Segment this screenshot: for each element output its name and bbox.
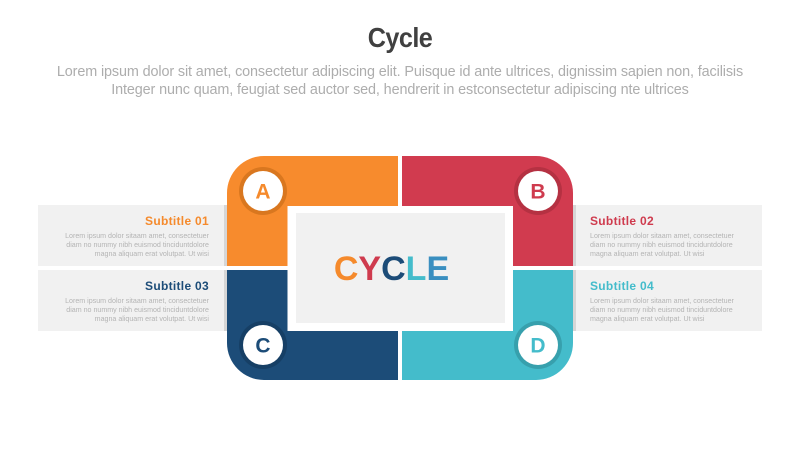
- panel: subtitle 04: diam no nummy nibh euismod tinciduntdolore: [590, 306, 733, 314]
- panel: subtitle 03: Subtitle 03: [145, 279, 209, 293]
- intro text: Integer nunc quam, feugiat sed auctor sed, hendrerit in estconsectetur adipiscing nte ultrices: [111, 82, 689, 98]
- badge A: A: [255, 180, 271, 204]
- panel: subtitle 01: Lorem ipsum dolor sitaam amet, consectetuer: [65, 232, 209, 240]
- title: Cycle: [368, 22, 432, 53]
- panel: subtitle 01: diam no nummy nibh euismod tinciduntdolore: [66, 241, 209, 249]
- badge D: D: [530, 334, 546, 358]
- panel: subtitle 03: [38, 270, 227, 331]
- panel: subtitle 02: Lorem ipsum dolor sitaam amet, consectetuer: [590, 232, 734, 240]
- panel: subtitle 01: Subtitle 01: [145, 214, 209, 228]
- badge C: C: [255, 334, 271, 358]
- panel: subtitle 04: magna aliquam erat volutpat. Ut wisi: [590, 315, 704, 323]
- panel: subtitle 01: magna aliquam erat volutpat. Ut wisi: [95, 250, 209, 258]
- panel: subtitle 03: diam no nummy nibh euismod tinciduntdolore: [66, 306, 209, 314]
- quadrant: red: [402, 156, 573, 266]
- badge D: [514, 321, 562, 369]
- badge C: [239, 321, 287, 369]
- center word: CYCLE: CYCLE: [334, 250, 449, 288]
- panel: subtitle 01: [38, 205, 227, 266]
- panel: subtitle 04: Lorem ipsum dolor sitaam amet, consectetuer: [590, 297, 734, 305]
- badge B: [514, 167, 562, 215]
- center frame: [288, 206, 513, 331]
- quadrant: navy: [227, 270, 398, 380]
- panel: subtitle 03: Lorem ipsum dolor sitaam amet, consectetuer: [65, 297, 209, 305]
- quadrant: orange: [227, 156, 398, 266]
- intro text: [57, 64, 743, 98]
- panel: subtitle 03: magna aliquam erat volutpat. Ut wisi: [95, 315, 209, 323]
- panel: subtitle 04: [573, 270, 762, 331]
- badge A: [239, 167, 287, 215]
- panel: subtitle 02: diam no nummy nibh euismod tinciduntdolore: [590, 241, 733, 249]
- panel: subtitle 04: Subtitle 04: [590, 279, 654, 293]
- quadrant: teal: [402, 270, 573, 380]
- panel: subtitle 02: magna aliquam erat volutpat. Ut wisi: [590, 250, 704, 258]
- panel: subtitle 02: Subtitle 02: [590, 214, 654, 228]
- panel: subtitle 02: [573, 205, 762, 266]
- intro text: Lorem ipsum dolor sit amet, consectetur adipiscing elit. Puisque id ante ultrices, dignissim sapien non, facilisis: [57, 64, 743, 80]
- badge B: B: [530, 180, 546, 204]
